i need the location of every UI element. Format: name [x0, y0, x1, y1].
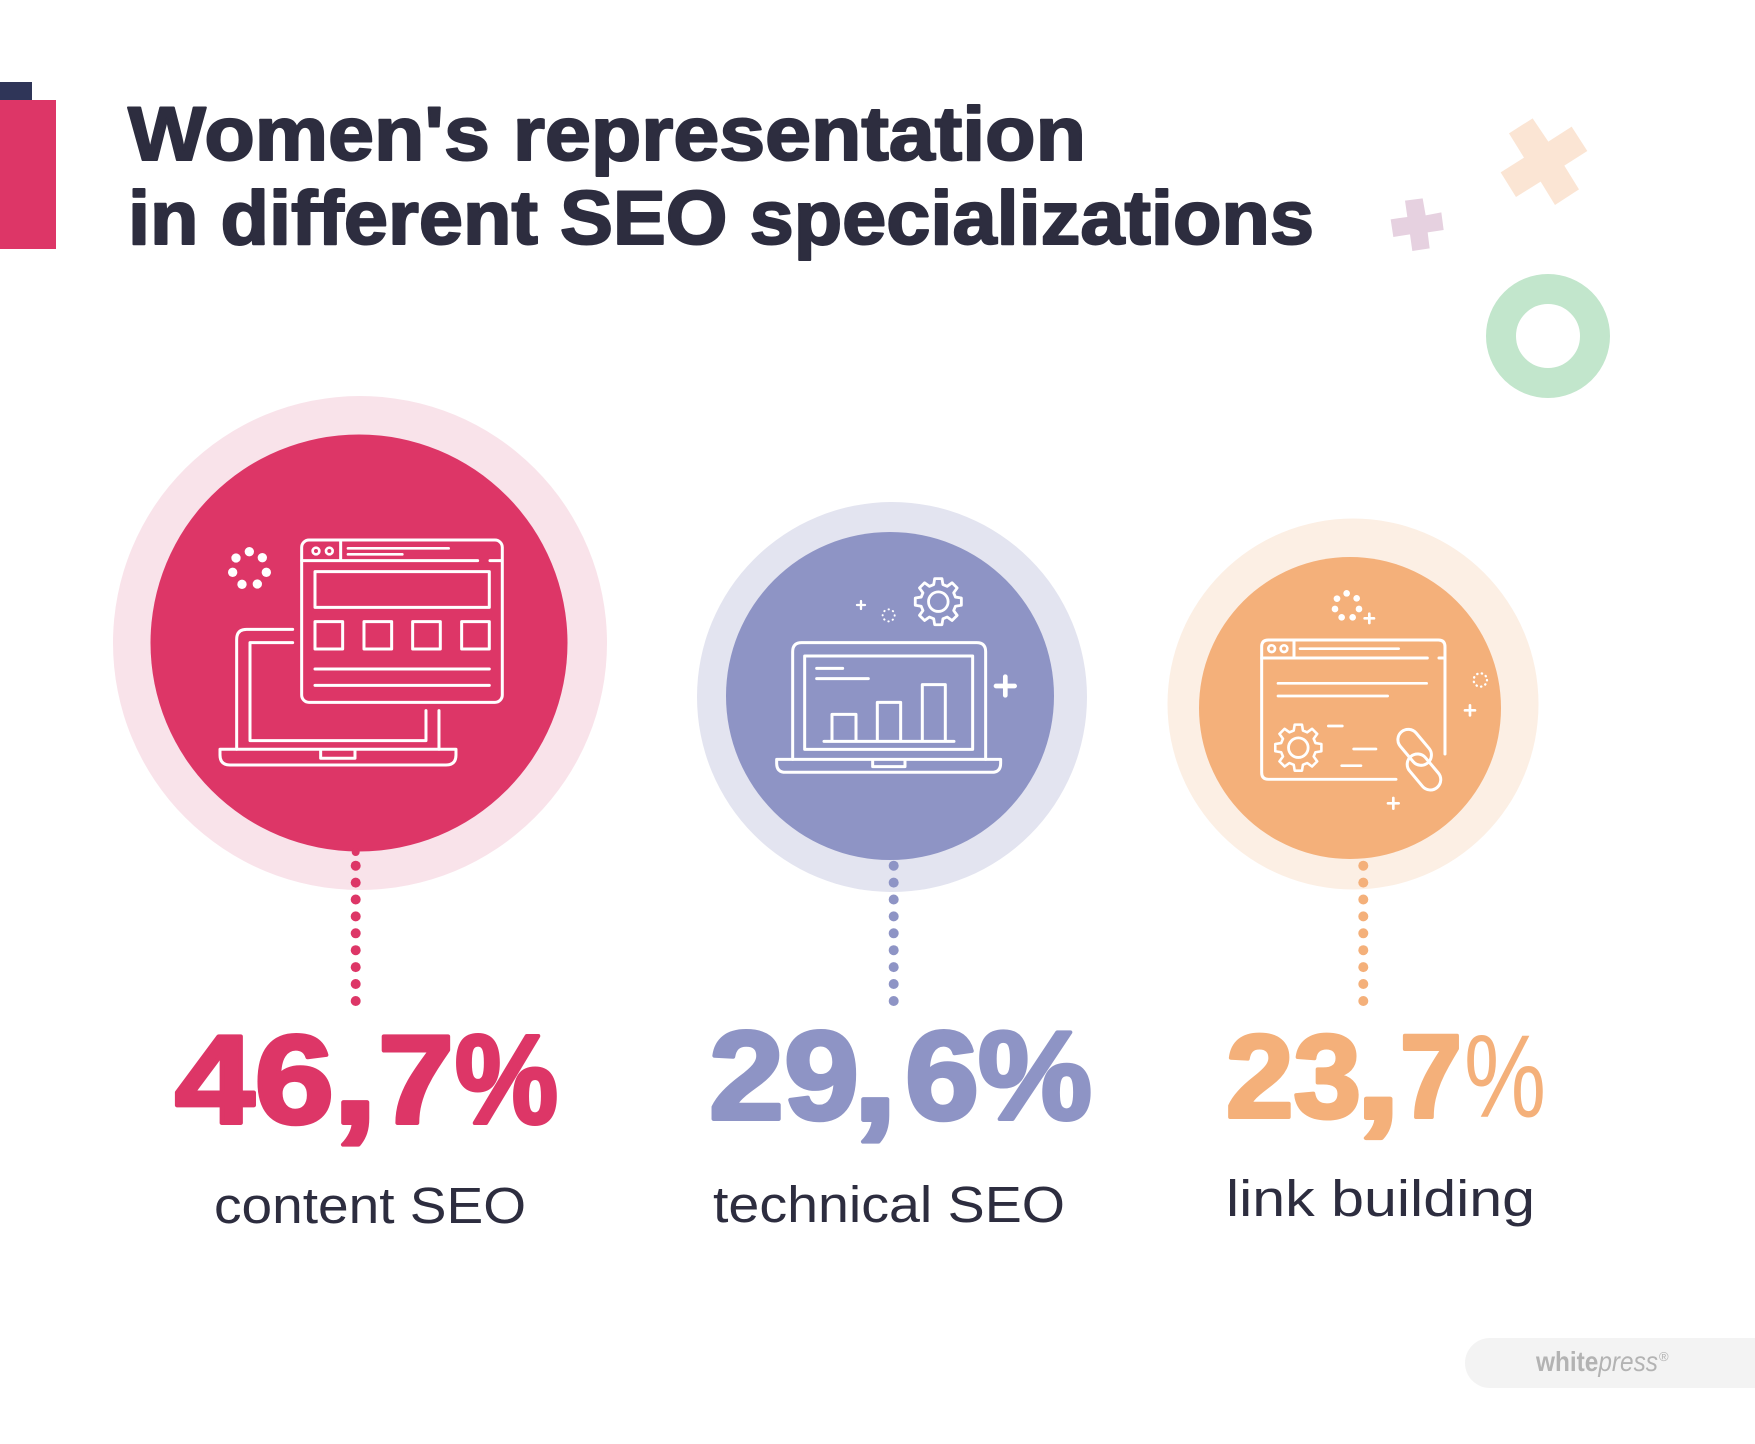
- footer logo: whitepress: whitepress: [1535, 1346, 1658, 1377]
- number: 23,7%: 7: [1400, 1011, 1462, 1143]
- number: 46,7%: 7: [378, 1009, 454, 1150]
- number: 29,6%: %: [978, 1005, 1092, 1146]
- label: technical SEO: technical SEO: [713, 1176, 1065, 1233]
- number: 23,7%: [1226, 1000, 1546, 1146]
- label: link building: link building: [1226, 1170, 1535, 1227]
- number: 46,7%: [175, 996, 558, 1153]
- icon: laptop with bar chart and gear: [777, 579, 1015, 772]
- number: 29,6%: 29: [709, 1005, 859, 1146]
- accent block: title marker: [0, 82, 56, 249]
- panel: technical SEO: [697, 502, 1092, 1233]
- panel: content SEO: [113, 396, 607, 1234]
- orange circle: [1168, 518, 1538, 890]
- footer logo: whitepress: [1465, 1338, 1755, 1388]
- title: in different SEO specializations: [128, 176, 1314, 261]
- decoration: peach cross: [1501, 118, 1587, 205]
- number: 46,7%: %: [455, 1009, 558, 1150]
- panel: link building: [1168, 518, 1546, 1227]
- purple circle: [697, 502, 1087, 892]
- footer logo: whitepress: ®: [1659, 1349, 1669, 1364]
- label: content SEO: content SEO: [214, 1177, 526, 1234]
- number: 29,6%: ,: [852, 993, 898, 1150]
- dotted connector: [889, 861, 899, 1006]
- title: Women's representation: [128, 92, 1086, 177]
- number: 46,7%: 46: [175, 1009, 334, 1150]
- dotted connector: [351, 848, 361, 1006]
- number: 23,7%: ,: [1355, 1000, 1401, 1146]
- decoration: green ring: [1501, 289, 1595, 383]
- decoration: lilac plus: [1391, 198, 1444, 251]
- number: 29,6%: 6: [905, 1005, 979, 1146]
- number: 23,7%: 23: [1226, 1011, 1361, 1143]
- title: [128, 92, 1314, 261]
- icon: browser window and laptop: [220, 540, 502, 765]
- number: 23,7%: %: [1464, 1011, 1546, 1143]
- pink circle: [113, 396, 607, 890]
- icon: browser window with gear and chain link: [1262, 590, 1487, 809]
- dotted connector: [1358, 861, 1368, 1006]
- number: 46,7%: ,: [332, 996, 378, 1153]
- number: 29,6%: [709, 993, 1092, 1150]
